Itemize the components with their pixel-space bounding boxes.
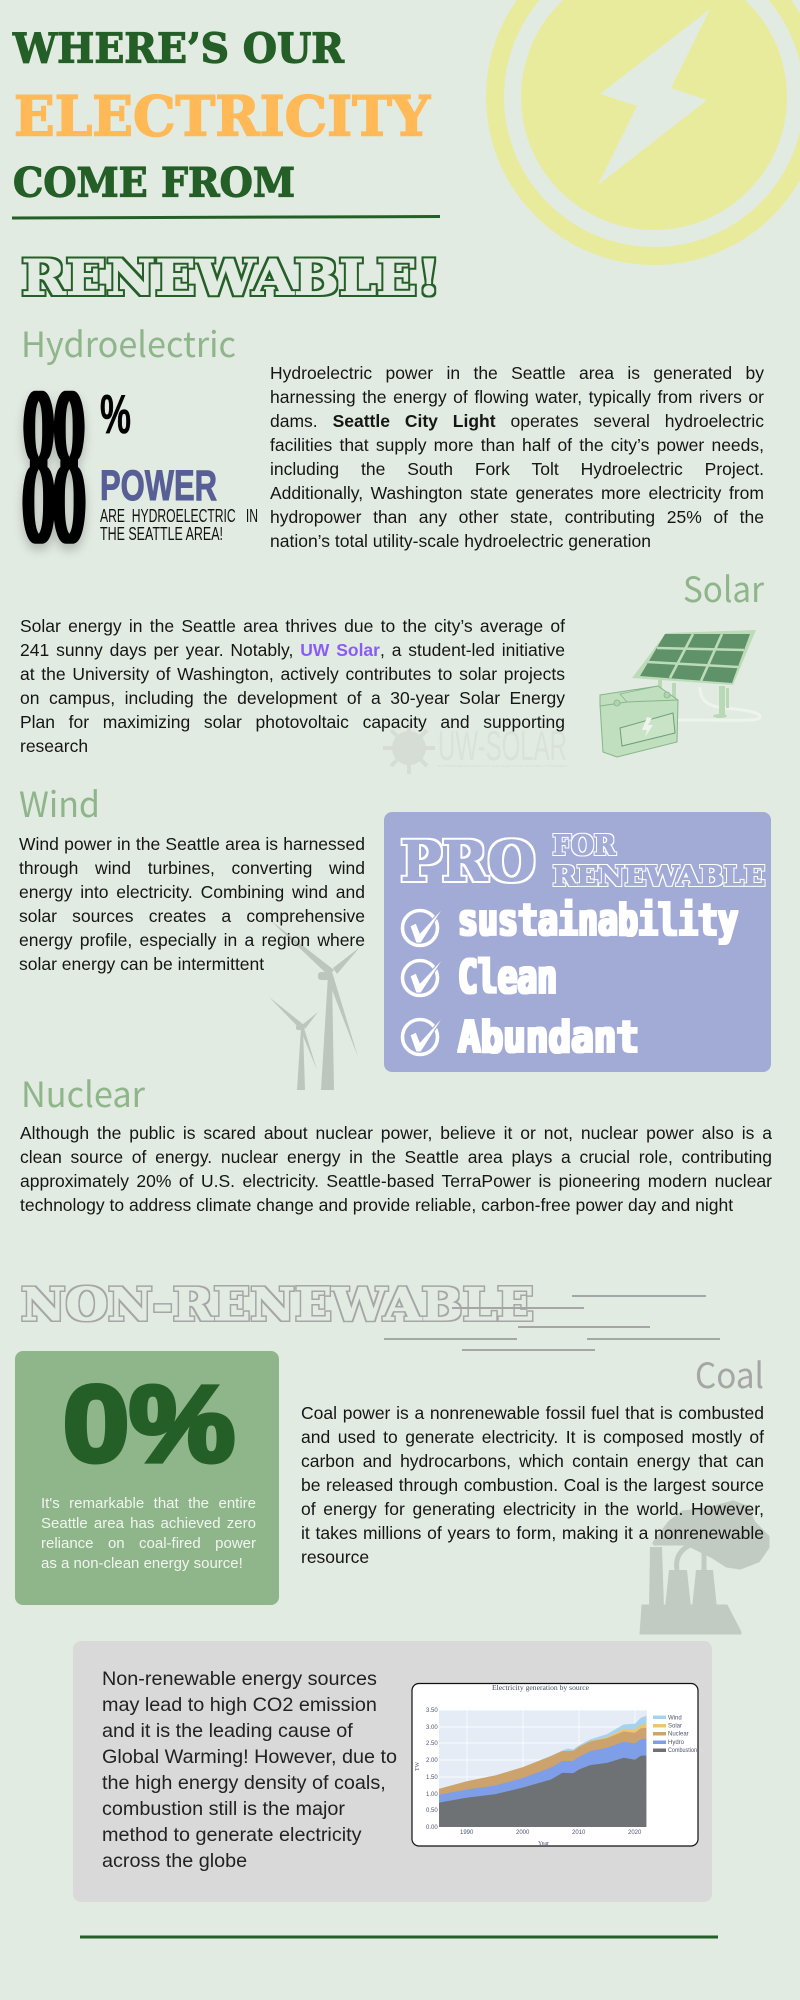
text block: non-renewable emissions note: across the globe — [102, 1850, 247, 1872]
axis labels: 3.00 — [426, 1725, 438, 1731]
text block: hydroelectric: facilities that supply more than half of the city’s power needs, — [270, 435, 764, 455]
icon: yellow lightning circle — [495, 0, 800, 256]
text block: nuclear — [20, 1123, 772, 1215]
text block: hydroelectric: hydropower than any other state, contributing 25% of the — [270, 507, 764, 527]
heading: hydroelectric: Hydroelectric — [21, 317, 236, 368]
text block: zero coal note — [41, 1495, 256, 1572]
axis labels: 1.00 — [426, 1792, 438, 1798]
icon: wind turbines — [269, 920, 360, 1090]
check item: clean — [402, 950, 557, 1004]
text block: wind — [19, 834, 365, 974]
legend — [653, 1716, 697, 1754]
panel: non-renewable note — [73, 1641, 712, 1902]
axis labels: 1990 — [460, 1830, 474, 1836]
axis labels: TW — [415, 1761, 421, 1771]
text block: hydroelectric: including the South Fork Tolt Hydroelectric Project. — [270, 459, 764, 479]
text block: non-renewable emissions note — [102, 1668, 397, 1872]
text block: coal: resource — [301, 1547, 369, 1567]
axis labels: 2020 — [628, 1830, 642, 1836]
text block: nuclear: clean source of energy. nuclear energy in the Seattle area plays a crucial role, contributing — [20, 1147, 772, 1167]
text block: non-renewable emissions note: Global Warming! However, due to — [102, 1746, 397, 1768]
text block: coal: carbon and hydrocarbons, which contain energy that can — [301, 1451, 764, 1471]
text block: solar: research — [20, 736, 88, 756]
icon: solar panel and battery — [600, 630, 760, 757]
area chart: electricity generation by source — [412, 1683, 698, 1847]
heading: renewable: RENEWABLE! — [22, 249, 440, 307]
text block: non-renewable emissions note: the high energy density of coals, — [102, 1772, 386, 1794]
heading: pro for renewable: FOR — [553, 830, 616, 861]
text block: non-renewable emissions note: method to generate electricity — [102, 1824, 362, 1846]
text block: zero coal note: It's remarkable that the entire — [41, 1495, 256, 1512]
title: WHERE’S OUR — [12, 24, 345, 72]
title: ELECTRICITY — [14, 84, 431, 148]
axis labels: 1.50 — [426, 1775, 438, 1781]
legend: Solar — [668, 1724, 682, 1730]
check item: abundant — [402, 1012, 639, 1063]
text block: zero coal note: Seattle area has achieved zero — [41, 1515, 256, 1532]
legend: Hydro — [668, 1740, 685, 1746]
text block: solar: Plan for maximizing solar photovoltaic capacity and supporting — [20, 712, 565, 732]
legend: Nuclear — [668, 1732, 689, 1738]
text block: coal: and used to generate electricity. It is composed mostly of — [301, 1427, 764, 1447]
heading: pro for renewable: RENEWABLE — [553, 861, 766, 892]
heading: wind: Wind — [19, 777, 100, 828]
legend: Wind — [668, 1716, 682, 1722]
text block: coal: of energy for generating electricity in the world. However, — [301, 1499, 764, 1519]
icon: UW Solar logo: UW-SOLAR — [438, 722, 567, 769]
text block: hydroelectric: dams. Seattle City Light operates several hydroelectric — [270, 411, 764, 431]
axis labels — [415, 1708, 642, 1847]
text block: wind: through wind turbines, converting wind — [19, 858, 365, 878]
text block: non-renewable emissions note: may lead to high CO2 emission — [102, 1694, 377, 1716]
panel: pro for renewable — [384, 812, 771, 1072]
axis labels: 3.50 — [426, 1708, 438, 1714]
text block: wind: energy into electricity. Combining wind and — [19, 882, 365, 902]
axis labels: 2.50 — [426, 1741, 438, 1747]
text block: nuclear: technology to address climate change and provide reliable, carbon-free power day and night — [20, 1195, 733, 1215]
text block: wind: solar energy can be intermittent — [19, 954, 264, 974]
text block: zero coal note: as a non-clean energy source! — [41, 1555, 243, 1572]
icon: factory with smoke — [640, 1503, 767, 1634]
stat: 88 percent power: POWER — [100, 462, 217, 510]
text block: coal: be released through combustion. Coal is the largest source — [301, 1475, 764, 1495]
check item: clean: Clean — [458, 950, 557, 1004]
text block: solar: at the University of Washington, actively contributes to solar projects — [20, 664, 565, 684]
icon: UW Solar logo — [383, 722, 567, 774]
stat: 88 percent power: % — [100, 383, 131, 445]
axis labels: 2.00 — [426, 1758, 438, 1764]
text block: wind: energy profile, especially in a region where — [19, 930, 365, 950]
chart title: Electricity generation by source — [492, 1683, 590, 1692]
axis labels: 0.50 — [426, 1808, 438, 1814]
heading: solar: Solar — [683, 562, 764, 613]
text block: hydroelectric: Hydroelectric power in the Seattle area is generated by — [270, 363, 764, 383]
stat: 88 percent power: THE SEATTLE AREA! — [100, 524, 223, 544]
stat: 0 percent: 0% — [63, 1363, 235, 1484]
text block: coal: it takes millions of years to form, making it a nonrenewable — [301, 1523, 764, 1543]
heading: nuclear: Nuclear — [21, 1067, 145, 1118]
text block: coal — [301, 1403, 764, 1567]
text block: non-renewable emissions note: combustion still is the major — [102, 1798, 345, 1820]
title: COME FROM — [13, 160, 295, 206]
text block: hydroelectric: Additionally, Washington state generates more electricity from — [270, 483, 764, 503]
text block: solar: 241 sunny days per year. Notably, UW Solar, a student-led initiative — [20, 640, 565, 660]
check item: abundant: Abundant — [458, 1012, 639, 1063]
title — [12, 24, 440, 218]
text block: wind: solar sources creates a comprehensive — [19, 906, 365, 926]
text block: nuclear: approximately 20% of U.S. electricity. Seattle-based TerraPower is pioneering modern nuclear — [20, 1171, 772, 1191]
text block: hydroelectric: nation’s total utility-scale hydroelectric generation — [270, 531, 651, 551]
text block: non-renewable emissions note: Non-renewable energy sources — [102, 1668, 377, 1690]
text block: hydroelectric — [270, 363, 764, 551]
heading: coal: Coal — [695, 1348, 764, 1399]
axis labels: 2000 — [516, 1830, 530, 1836]
text block: wind: Wind power in the Seattle area is harnessed — [19, 834, 365, 854]
icon: UW Solar logo: an interdisciplinary student-run solar project at the University of Washington — [438, 764, 567, 768]
panel: zero percent coal — [15, 1351, 279, 1605]
axis labels: 0.00 — [426, 1825, 438, 1831]
text block: non-renewable emissions note: and it is the leading cause of — [102, 1720, 353, 1742]
text block: solar: Solar energy in the Seattle area thrives due to the city’s average of — [20, 616, 565, 636]
text block: solar: on campus, including the development of a 30-year Solar Energy — [20, 688, 565, 708]
stat: 88 percent power: 88 — [24, 340, 84, 593]
legend: Combustion — [668, 1748, 697, 1754]
axis labels: 2010 — [572, 1830, 586, 1836]
text block: zero coal note: reliance on coal-fired power — [41, 1535, 256, 1552]
stat: 88 percent power: ARE HYDROELECTRIC IN — [100, 506, 258, 526]
text block: solar — [20, 616, 565, 756]
text block: nuclear: Although the public is scared about nuclear power, believe it or not, nuclear power also is a — [20, 1123, 772, 1143]
heading: pro for renewable — [400, 828, 766, 894]
text block: hydroelectric: harnessing the energy of flowing water, typically from rivers or — [270, 387, 764, 407]
heading: pro for renewable: PRO — [400, 828, 536, 894]
stacked areas — [439, 1716, 646, 1827]
text block: coal: Coal power is a nonrenewable fossil fuel that is combusted — [301, 1403, 764, 1423]
heading: non-renewable: NON-RENEWABLE — [21, 1278, 534, 1331]
axis labels: Year — [538, 1841, 549, 1847]
